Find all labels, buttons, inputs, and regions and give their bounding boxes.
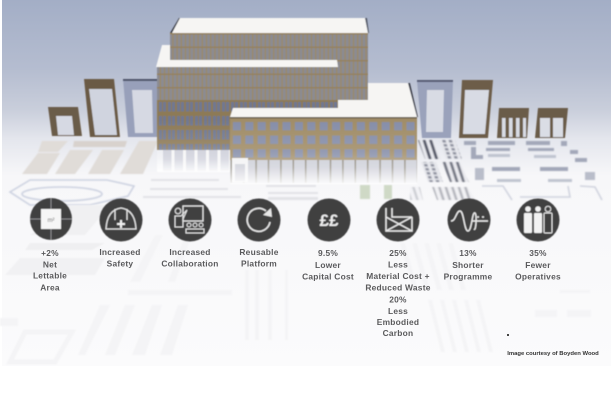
frame: grey right — [417, 80, 453, 138]
label: fewer operatives: 35% — [529, 248, 547, 258]
upper block — [170, 18, 369, 100]
label: shorter programme: 13% — [459, 248, 477, 258]
label: increased safety: Increased — [99, 247, 141, 257]
label: lower capital cost: Capital Cost — [302, 272, 354, 282]
label: material cost and embodied carbon: Less — [388, 260, 408, 270]
lower plan faint shapes — [0, 205, 591, 362]
image credit: Image courtesy of Boyden Wood — [507, 351, 599, 357]
label: reusable platform: Reusable — [239, 247, 279, 257]
front block — [230, 83, 418, 184]
frame: tall bronze left — [84, 79, 120, 137]
label: material cost and embodied carbon: 25% — [389, 248, 407, 258]
label: material cost and embodied carbon: 20% — [389, 294, 407, 304]
left hexagonal ring — [10, 180, 134, 205]
label: increased collaboration: Increased — [169, 247, 211, 257]
icon: collaboration presenter — [168, 198, 212, 242]
right ductwork plan pieces — [464, 141, 595, 182]
icon: m2 net lettable area: m² — [48, 218, 54, 224]
icon: reusable circular arrow — [238, 198, 280, 242]
label: material cost and embodied carbon: Less — [388, 306, 408, 316]
label: increased safety: Safety — [107, 258, 133, 268]
icon: pounds capital cost: ££ — [320, 211, 339, 230]
centre plan strips — [143, 179, 318, 200]
frame: grey left — [123, 79, 158, 137]
exploded floor plan components — [10, 140, 602, 205]
label: reusable platform: Platform — [241, 258, 277, 268]
icon: hard hat safety — [100, 198, 142, 242]
label: increased collaboration: Collaboration — [161, 258, 219, 268]
frame: tall bronze right — [459, 80, 493, 138]
freestanding frames — [48, 79, 568, 138]
frame: double small right — [535, 108, 568, 138]
label: material cost and embodied carbon: Reduced Waste — [365, 282, 431, 292]
label: material cost and embodied carbon: Material Cost + — [366, 271, 430, 281]
icon: pounds capital cost — [308, 198, 350, 242]
left floor slabs — [22, 141, 158, 174]
building model — [156, 18, 418, 184]
frame: far left small — [48, 107, 82, 136]
label: material cost and embodied carbon: Carbon — [383, 328, 413, 338]
label: fewer operatives: Operatives — [515, 272, 561, 282]
frame: slatted small right — [497, 108, 529, 138]
icon: programme wave — [448, 198, 490, 242]
icon labels — [33, 247, 561, 338]
label: lower capital cost: 9.5% — [318, 248, 338, 258]
right slatted panels — [418, 140, 441, 159]
icon: material waste skip — [376, 198, 420, 242]
central green components — [360, 185, 370, 199]
small dot mark — [507, 334, 509, 336]
label: net lettable area: Area — [40, 283, 60, 293]
label: lower capital cost: Lower — [315, 260, 341, 270]
middle block — [156, 45, 338, 172]
icon: m2 net lettable area — [30, 198, 72, 240]
label: shorter programme: Shorter — [452, 260, 484, 270]
label: shorter programme: Programme — [444, 272, 492, 282]
icon: operatives figures — [516, 198, 560, 242]
label: fewer operatives: Fewer — [525, 260, 551, 270]
label: net lettable area: +2% — [41, 248, 59, 258]
label: net lettable area: Lettable — [33, 271, 67, 281]
label: net lettable area: Net — [43, 260, 57, 270]
label: material cost and embodied carbon: Embodied — [377, 317, 419, 327]
